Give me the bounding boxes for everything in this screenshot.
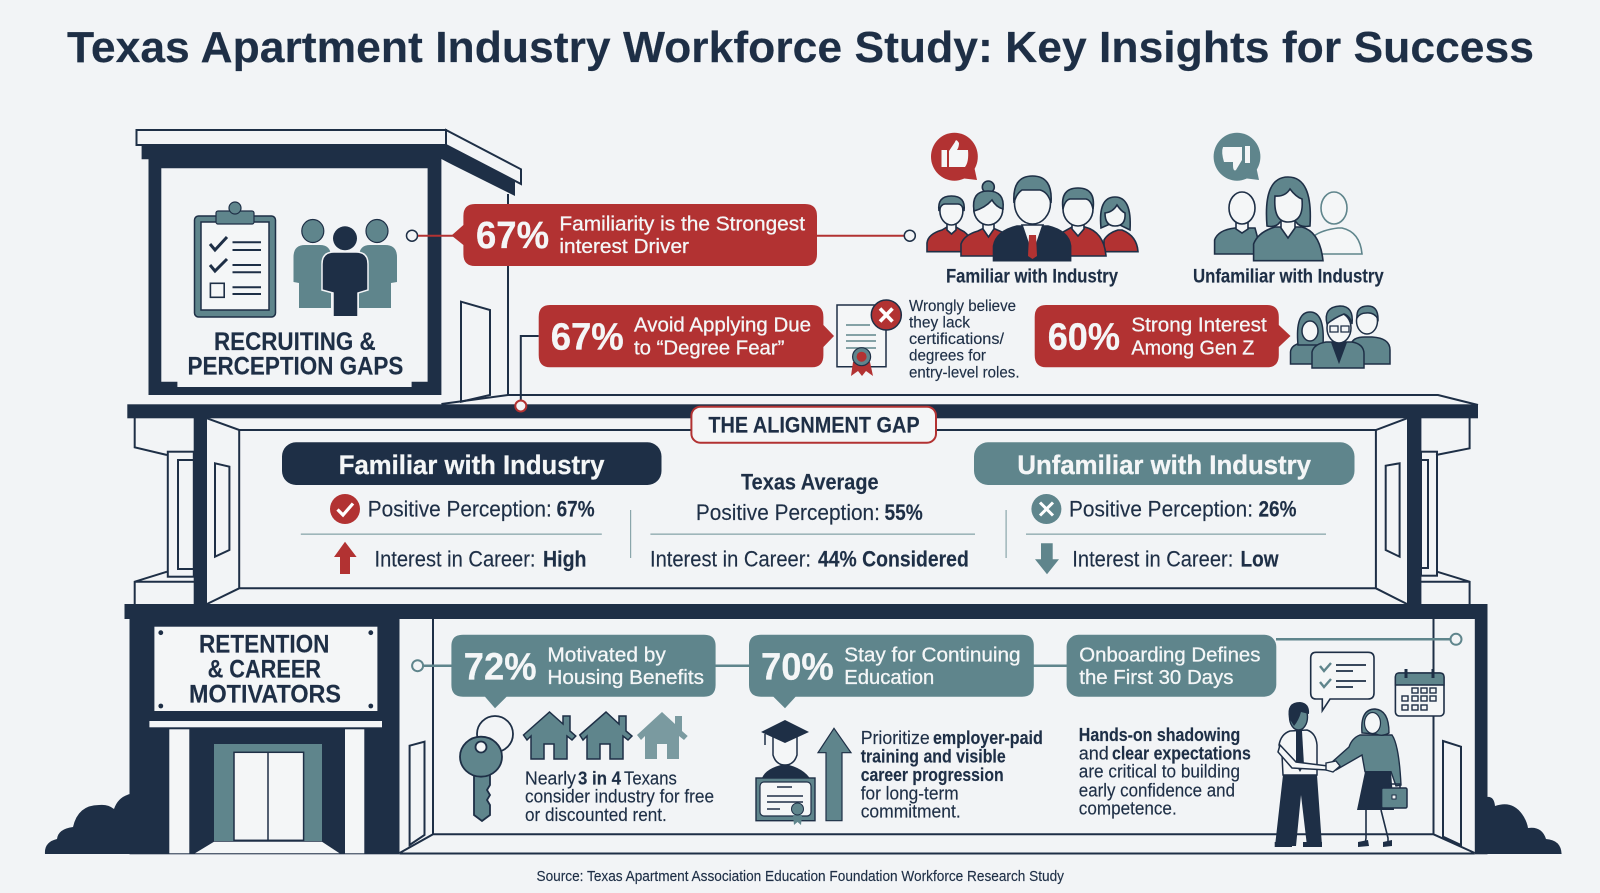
sign: & CAREER [208,655,321,683]
text: housing details [525,768,714,825]
icon: certificate with cross [837,300,901,376]
sign: RETENTION [199,630,330,658]
callout: degree fear [515,305,834,412]
heading: PERCEPTION GAPS [188,352,403,380]
callout: gen z interest: Among Gen Z [1131,337,1254,359]
ground floor band [124,604,1488,619]
woman [1331,709,1407,847]
label: familiar with industry: Familiar with Industry [946,267,1118,288]
interest low: Interest in Career: [1072,547,1233,572]
icon: calendar [1395,669,1444,716]
header [282,442,662,485]
callout: onboarding first 30 days [1067,634,1462,697]
positive perception 67: 67% [557,497,595,522]
text: wrongly believe: certifications/ [909,331,1005,348]
text: wrongly believe: degrees for [909,348,987,365]
header [974,442,1354,485]
text: onboarding details: early confidence and [1079,780,1235,800]
top floor frame [148,159,441,395]
icon: houses [524,712,688,759]
panel: texas average column: Positive Perception: [696,500,880,525]
panel: texas average column: Interest in Career: [650,547,811,572]
icon: thumbs down bubble [1214,133,1260,181]
callout: familiarity is the strongest driver: 67% [476,215,549,257]
callout: gen z interest [1035,305,1290,367]
icon: familiar group [927,176,1138,261]
text: onboarding details: and [1079,743,1109,763]
panel: retention entrance [149,627,382,853]
callout: degree fear: 67% [551,316,624,358]
callout: familiarity is the strongest driver [406,204,915,266]
text: onboarding details: competence. [1079,799,1177,819]
text: onboarding details: Hands-on shadowing [1079,725,1240,745]
sign [154,627,377,711]
panel: texas average column: 55% [884,500,923,525]
callout: degree fear: to “Degree Fear” [634,337,784,359]
text: wrongly believe: they lack [909,314,971,331]
icon: thumbs up bubble [931,133,978,181]
clasped hands [1326,761,1340,772]
panel: texas average column: Texas Average [741,469,879,494]
icon: down arrow [1035,543,1059,574]
icon: unfamiliar group [1215,177,1362,261]
callout: 72 percent housing benefits: Housing Benefits [547,667,704,689]
text: housing details: or discounted rent. [525,805,667,825]
ground floor left block [130,619,400,854]
text: onboarding details [1079,725,1251,819]
callout: onboarding first 30 days: the First 30 Days [1079,667,1233,689]
positive perception 26: 26% [1258,497,1296,522]
panel: familiar with industry column [282,442,662,574]
positive perception 26: Positive Perception: [1069,497,1253,522]
text: training details: career progression [861,765,1004,785]
callout: 70 percent continuing education: 70% [761,646,834,688]
callout: 70 percent continuing education: Education [844,667,934,689]
source note: Source: Texas Apartment Association Education Foundation Workforce Research Study [536,868,1064,885]
callout: degree fear: Avoid Applying Due [634,315,811,337]
callout: gen z interest: Strong Interest [1131,315,1267,337]
callout: 72 percent housing benefits: Motivated by [547,645,666,667]
positive perception 67: Positive Perception: [368,497,552,522]
left bushes [45,794,130,854]
callout: familiarity is the strongest driver: Familiarity is the Strongest [559,214,805,236]
callout: 72 percent housing benefits: 72% [464,646,536,688]
top floor roof [136,130,521,196]
panel: texas average column: 44% Considered [818,547,969,572]
text: onboarding details: are critical to building [1079,762,1240,782]
icon: key [460,716,513,821]
text: wrongly believe: entry-level roles. [909,364,1020,381]
text: housing details: Nearly [525,768,576,788]
panel: texas average column [650,469,975,572]
label: unfamiliar with industry: Unfamiliar with Industry [1193,267,1384,288]
text: training details: employer-paid [933,728,1043,748]
interest low: Low [1240,547,1279,572]
left wing of middle floor [135,418,194,604]
callout: 70 percent continuing education [749,635,1067,708]
heading: RECRUITING & [214,328,376,356]
icon: clipboard [194,202,276,317]
icon: three people [294,220,397,317]
ground floor right column [1475,619,1488,854]
building illustration [45,130,1562,854]
label: the alignment gap [691,407,936,443]
text: training details [861,728,1043,822]
interest high: Interest in Career: [374,547,536,572]
icon: career arrow [818,728,851,821]
ground floor room [400,619,1475,854]
icon: checklist speech bubble [1311,652,1374,711]
label: the alignment gap: THE ALIGNMENT GAP [708,412,920,437]
callout: 70 percent continuing education: Stay for Continuing [844,645,1021,667]
callout: 72 percent housing benefits [412,635,750,708]
header: Unfamiliar with Industry [1017,450,1311,480]
upper floor band [127,404,1478,418]
icon: gen z group [1290,306,1390,368]
interest high: High [543,547,586,572]
icon: cross [1031,494,1061,524]
text: onboarding details: clear expectations [1112,743,1251,763]
text: housing details: consider industry for free [525,787,714,807]
text: wrongly believe [909,298,1020,381]
header: Familiar with Industry [339,450,604,480]
icon: check [330,494,360,524]
right bushes [1487,797,1562,854]
man [1275,702,1328,847]
panel: unfamiliar with industry column [974,442,1354,574]
text: training details: for long-term [861,783,959,803]
text: training details: Prioritize [861,728,930,748]
icon: graduate with diploma [756,720,815,825]
icon: up arrow [334,542,357,574]
middle floor room [194,418,1421,604]
text: wrongly believe: Wrongly believe [909,298,1016,315]
sign: MOTIVATORS [189,680,341,708]
text: training details: commitment. [861,802,961,822]
entrance [149,721,382,853]
callout: onboarding first 30 days: Onboarding Defines [1079,645,1260,667]
callout: familiarity is the strongest driver: interest Driver [559,236,689,258]
callout: gen z interest: 60% [1048,316,1120,358]
text: housing details: 3 in 4 [578,768,621,788]
right wing of middle floor [1421,418,1470,604]
heading [188,328,403,380]
icon: handshake figures [1275,702,1407,847]
title: Texas Apartment Industry Workforce Study: Key Insights for Success [67,23,1534,72]
top floor side wall and door [441,159,1478,405]
text: training details: training and visible [861,747,1006,767]
panel: recruiting and perception gaps [188,202,403,380]
text: housing details: Texans [624,768,677,788]
